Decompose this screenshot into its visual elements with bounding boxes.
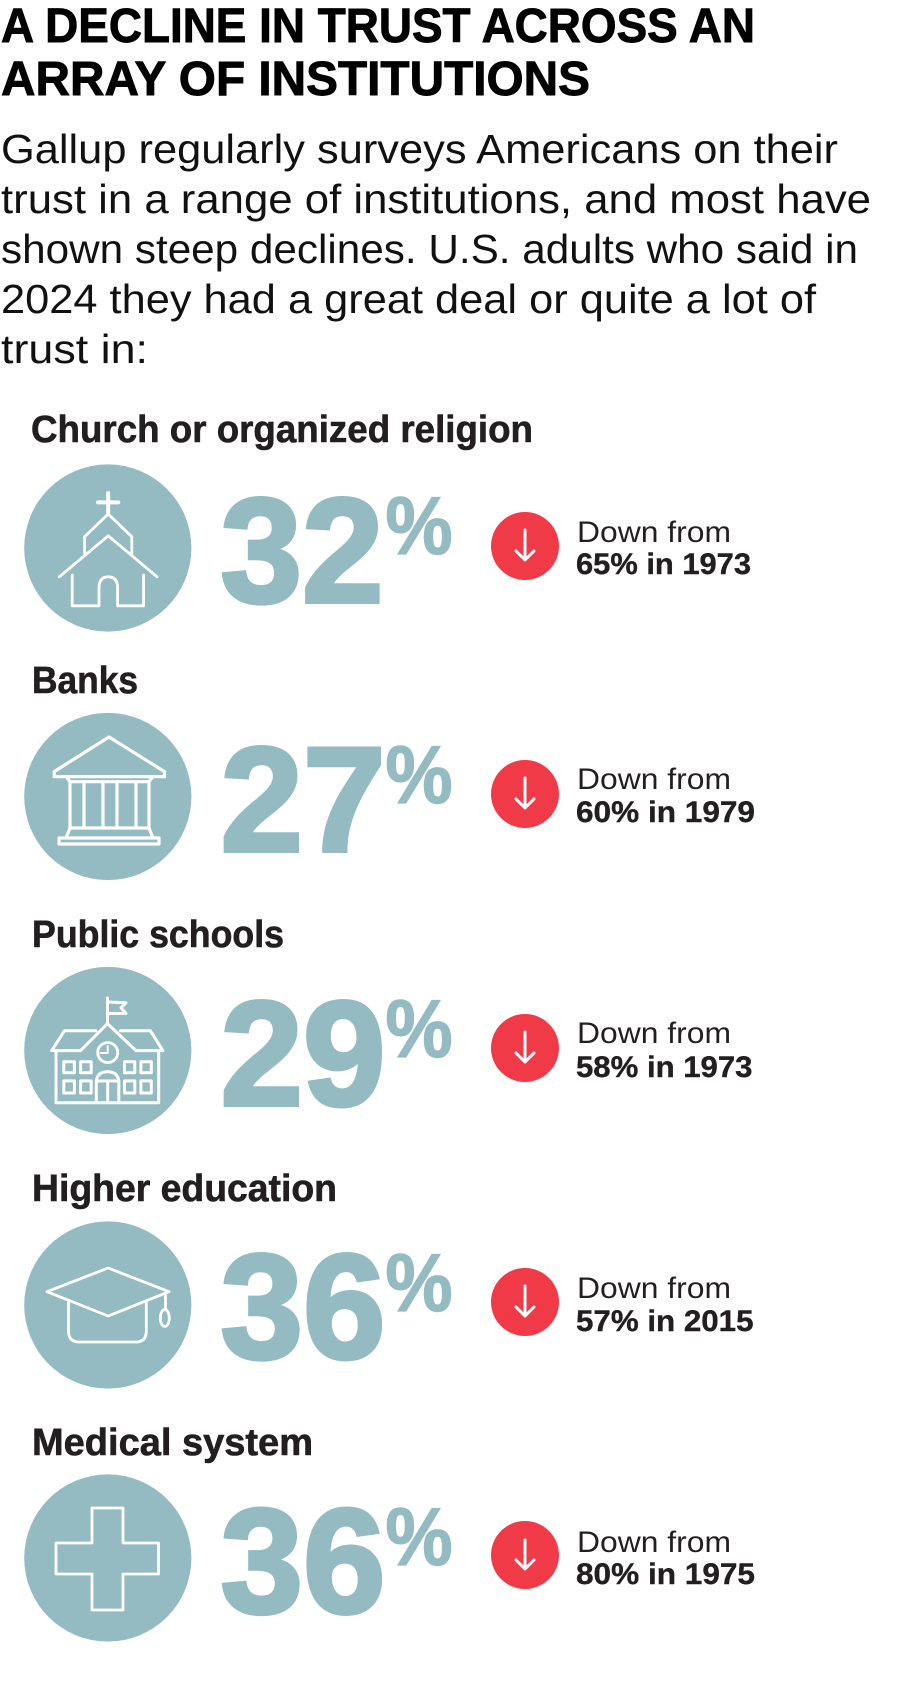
heading: higher education: Higher education: [32, 1168, 337, 1210]
intro text: trust in a range of institutions, and most have: [1, 176, 871, 222]
change note: [576, 1017, 752, 1084]
value: 36 percent: 36: [220, 1478, 386, 1644]
icon: church: [24, 464, 191, 632]
change note: [576, 516, 751, 581]
value: 36 percent: %: [386, 1238, 452, 1329]
value: 29 percent: 29: [220, 970, 386, 1137]
panel: higher education: [24, 1168, 753, 1390]
icon: graduation cap: [24, 1221, 191, 1389]
intro text: shown steep declines. U.S. adults who said in: [1, 226, 858, 272]
icon: down arrow: [491, 1014, 559, 1082]
panel: medical system: [24, 1422, 755, 1644]
value: 27 percent: 27: [220, 716, 386, 883]
panel: public schools: [24, 914, 752, 1137]
icon: schoolhouse: [24, 967, 191, 1134]
change note: 80% in 1975: [576, 1558, 755, 1591]
change note: Down from: [577, 1526, 731, 1559]
title: [1, 0, 755, 106]
change note: Down from: [577, 1017, 731, 1050]
panel: church or organized religion: [24, 409, 751, 634]
icon: down arrow: [491, 512, 559, 580]
heading: public schools: Public schools: [32, 914, 284, 956]
value: 36 percent: %: [386, 1492, 452, 1583]
change note: 60% in 1979: [576, 796, 755, 829]
intro text: Gallup regularly surveys Americans on their: [1, 126, 838, 172]
icon: bank: [24, 713, 191, 880]
icon: medical cross: [24, 1474, 191, 1642]
heading: church: Church or organized religion: [31, 409, 533, 451]
icon: down arrow: [491, 1268, 559, 1336]
panel: banks: [24, 660, 755, 883]
value: 29 percent: %: [386, 984, 452, 1075]
value: 32 percent: %: [386, 481, 452, 572]
icon: down arrow: [491, 760, 559, 828]
change note: 57% in 2015: [576, 1305, 754, 1338]
change note: 58% in 1973: [576, 1051, 752, 1084]
icon: down arrow: [491, 1521, 559, 1589]
value: 36 percent: 36: [220, 1223, 386, 1390]
change note: Down from: [577, 516, 731, 549]
value: 27 percent: %: [386, 730, 452, 821]
change note: [576, 1272, 754, 1338]
change note: [576, 1526, 755, 1591]
change note: Down from: [577, 763, 731, 796]
intro text: 2024 they had a great deal or quite a lot of: [1, 276, 817, 322]
heading: medical system: Medical system: [32, 1422, 313, 1464]
change note: 65% in 1973: [576, 548, 751, 581]
change note: Down from: [577, 1272, 731, 1305]
change note: [576, 763, 755, 829]
title: ARRAY OF INSTITUTIONS: [1, 53, 590, 106]
intro text: trust in:: [1, 326, 148, 372]
intro text: [1, 126, 871, 372]
heading: banks: Banks: [32, 660, 138, 702]
title: A DECLINE IN TRUST ACROSS AN: [1, 0, 755, 53]
value: 32 percent: 32: [220, 467, 384, 634]
